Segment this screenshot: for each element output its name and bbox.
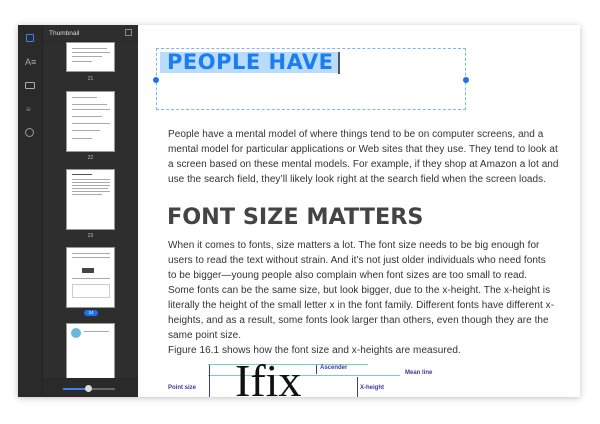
content area bbox=[140, 25, 580, 397]
label: Ascender: Ascender bbox=[320, 365, 347, 371]
label: X-height: X-height bbox=[360, 385, 384, 391]
sidebar: 21 bbox=[88, 76, 93, 82]
font size paragraph: Figure 16.1 shows how the font size and x-heights are measured. bbox=[168, 345, 461, 356]
icon: list: ≡ bbox=[26, 105, 31, 114]
header: Thumbnail: Thumbnail bbox=[49, 30, 79, 37]
icon: thumbnail bbox=[26, 34, 34, 42]
thumbnails bbox=[66, 42, 115, 72]
font size paragraph: heights, and as a result, some fonts look larger than others, even though they are the bbox=[168, 315, 549, 326]
intro paragraph: a screen based on these mental models. For example, if they shop at Amazon a lot and bbox=[168, 159, 559, 170]
font size paragraph: When it comes to fonts, size matters a lot. The font size needs to be big enough for bbox=[168, 240, 539, 251]
font size paragraph: users to read the text without strain. And it’s not just older individuals who need fonts bbox=[168, 255, 546, 266]
page badge 24 bbox=[84, 310, 98, 316]
label: Point size: Point size bbox=[168, 385, 196, 391]
font size paragraph bbox=[168, 240, 554, 356]
intro paragraph: People have a mental model of where things tend to be on computer screens, and a bbox=[168, 129, 543, 140]
sidebar: 22 bbox=[88, 155, 93, 161]
icon: settings bbox=[25, 128, 34, 137]
font size paragraph: to be bigger—young people also complain when font sizes are too small to read. bbox=[168, 270, 527, 281]
title: PEOPLE HAVE: PEOPLE HAVE bbox=[167, 50, 334, 74]
zoom slider bbox=[43, 378, 138, 397]
sidebar: 23 bbox=[88, 233, 93, 239]
page badge 24: 24 bbox=[88, 310, 94, 315]
font size paragraph: Some fonts can be the same size, but look bigger, due to the x-height. The x-height is bbox=[168, 285, 550, 296]
intro paragraph: mental model for particular applications or Web sites that they use. They tend to look at bbox=[168, 144, 558, 155]
title selection box bbox=[156, 48, 466, 110]
heading: FONT SIZE MATTERS: FONT SIZE MATTERS bbox=[167, 204, 423, 230]
font size paragraph: literally the height of the small letter x in the font family. Different fonts have different x- bbox=[168, 300, 554, 311]
icon strip bbox=[18, 25, 43, 397]
intro paragraph: use the search field, they’ll likely look right at the search field when the screen loads. bbox=[168, 174, 546, 185]
sidebar bbox=[18, 25, 138, 397]
label: Mean line: Mean line bbox=[405, 370, 432, 376]
font size paragraph: same point size. bbox=[168, 330, 241, 341]
icon: book bbox=[25, 82, 35, 89]
figure: font metrics bbox=[168, 358, 432, 397]
header: Thumbnail bbox=[43, 25, 138, 42]
icon: text: A≡ bbox=[25, 57, 36, 67]
intro paragraph bbox=[168, 129, 559, 185]
